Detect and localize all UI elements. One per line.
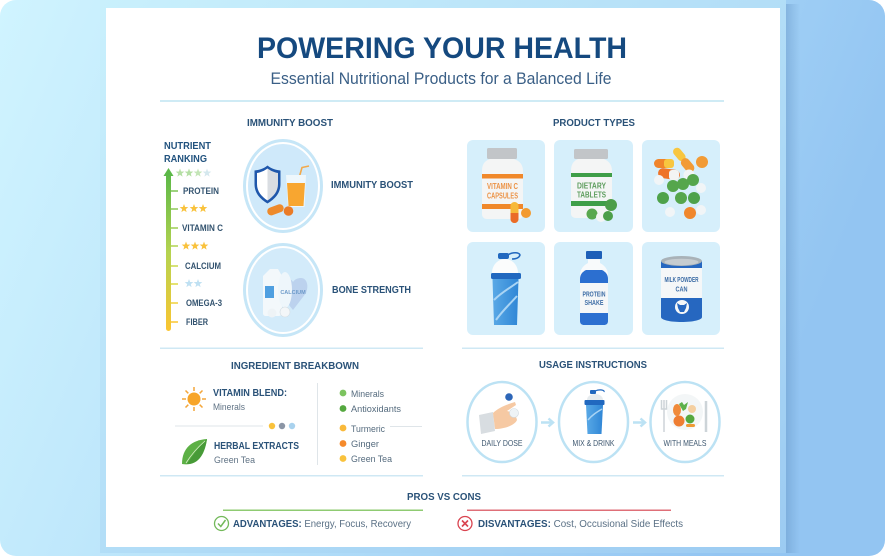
panel: nutrient ranking [164, 141, 223, 331]
subtitle: Essential Nutritional Products for a Balanced Life [270, 70, 612, 88]
legend list [340, 389, 422, 465]
step: with meals [650, 382, 720, 462]
heading: nutrient ranking: NUTRIENT [164, 141, 211, 152]
panel shadow [786, 4, 800, 553]
legend list: Minerals [351, 389, 384, 400]
panel: usage instructions [468, 382, 720, 462]
stars: fourth row [185, 279, 202, 287]
product tile: shaker [467, 242, 545, 335]
text: vitamin blend: Minerals [213, 402, 245, 413]
main card [100, 0, 786, 553]
label: vitamin c: VITAMIN C [182, 223, 223, 233]
label: protein: PROTEIN [183, 186, 219, 196]
stars: top row [176, 168, 211, 177]
product tile: milk powder can: MILK POWDER [664, 275, 699, 284]
text: disadvantages: DISVANTAGES: Cost, Occusional Side Effects [478, 518, 683, 530]
disadvantages [458, 516, 683, 530]
label: fiber: FIBER [186, 317, 208, 327]
heading: immunity boost: IMMUNITY BOOST [247, 117, 334, 129]
heading: usage instructions: USAGE INSTRUCTIONS [539, 359, 647, 371]
legend list: Ginger [351, 439, 379, 450]
product tile: dietary tablets: DIETARY [577, 180, 606, 190]
label: omega-3: OMEGA-3 [186, 298, 222, 308]
label: immunity boost: IMMUNITY BOOST [331, 179, 414, 191]
product tile: vitamin c capsules: CAPSULES [487, 192, 518, 200]
label: bone strength: BONE STRENGTH [332, 284, 411, 296]
icon: immunity boost circle [243, 139, 323, 233]
product tile: protein shake [554, 242, 633, 335]
stars: second row [180, 204, 207, 212]
icon: bone strength circle: CALCIUM [280, 290, 306, 296]
heading: ingredient breakdown: INGREDIENT BREAKBOWN [231, 360, 359, 372]
product tile: protein shake: PROTEIN [582, 292, 606, 298]
product tile: dietary tablets [554, 140, 633, 232]
heading: nutrient ranking: RANKING [164, 154, 207, 165]
product tile: assorted pills [642, 140, 720, 232]
panel: product types [467, 140, 720, 335]
icon: sun [182, 387, 206, 411]
product tile: protein shake: SHAKE [584, 300, 604, 307]
step: daily dose [468, 382, 536, 462]
text: herbal extracts [214, 440, 299, 466]
step: mix and drink [559, 382, 628, 462]
heading: pros vs cons: PROS VS CONS [407, 491, 481, 503]
heading: product types: PRODUCT TYPES [553, 117, 635, 129]
title: POWERING YOUR HEALTH [257, 32, 627, 65]
text: vitamin blend: VITAMIN BLEND: [213, 387, 287, 399]
arrow [633, 418, 645, 426]
step: mix and drink: MIX & DRINK [572, 438, 615, 448]
heading: nutrient ranking [164, 141, 211, 165]
ranking arrow [164, 168, 178, 331]
icon: check [214, 516, 228, 530]
icon: cross [458, 516, 472, 530]
icon: leaf [182, 439, 207, 464]
text: vitamin blend [213, 387, 287, 413]
text: herbal extracts: HERBAL EXTRACTS [214, 440, 299, 452]
panel: ingredient breakdown [175, 383, 422, 466]
step: with meals: WITH MEALS [664, 438, 707, 448]
stars: third row [182, 242, 208, 250]
product tile: milk powder can: CAN [676, 284, 688, 294]
legend list: Green Tea [351, 454, 393, 465]
product tile: milk powder can [642, 242, 720, 335]
text: herbal extracts: Green Tea [214, 455, 256, 466]
product tile: vitamin c capsules: VITAMIN C [487, 182, 518, 191]
product tile: dietary tablets: TABLETS [577, 190, 606, 200]
icon: bone strength circle [243, 243, 323, 337]
advantages [214, 516, 412, 530]
step: daily dose: DAILY DOSE [482, 438, 523, 448]
product tile: vitamin c capsules [467, 140, 545, 232]
decorative dots [269, 423, 295, 429]
text: advantages: ADVANTAGES: Energy, Focus, Recovery [233, 518, 412, 530]
legend list: Antioxidants [351, 404, 401, 415]
arrow [541, 418, 553, 426]
legend list: Turmeric [351, 424, 385, 435]
label: calcium: CALCIUM [185, 261, 221, 271]
